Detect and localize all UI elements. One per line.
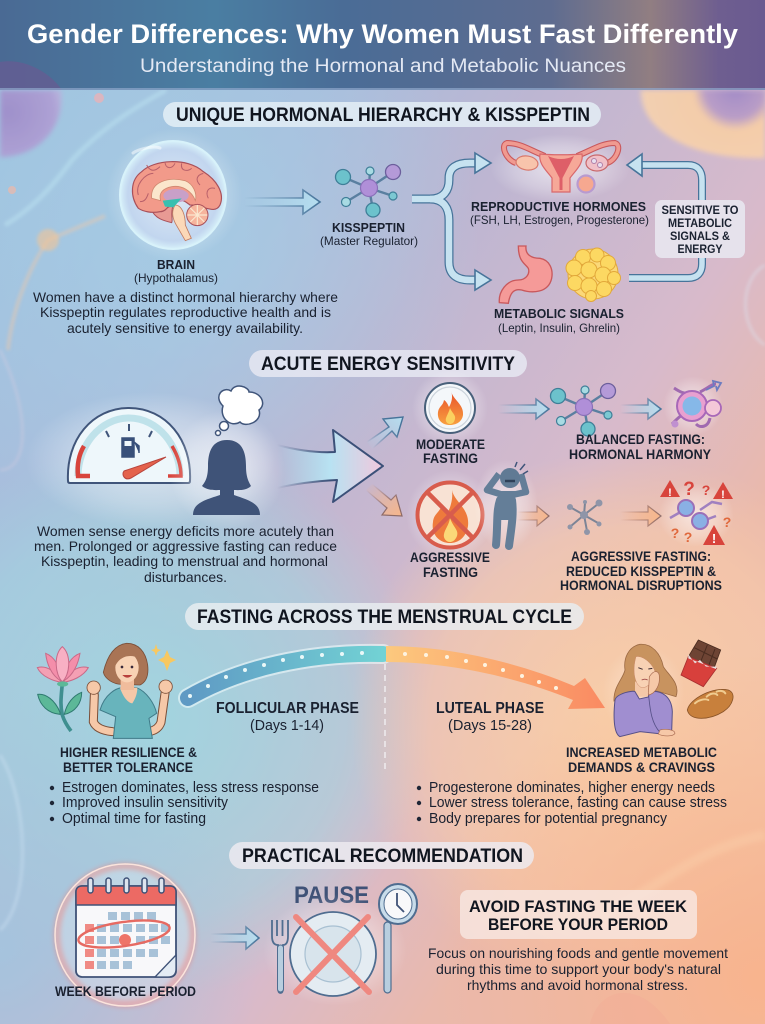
subtitle: Understanding the Hormonal and Metabolic Nuances [140, 56, 626, 77]
label: brain [134, 257, 218, 285]
icon: happy woman [87, 643, 172, 738]
text: hormonal hierarchy description: Women have a distinct hormonal hierarchy where [33, 289, 338, 305]
label: kisspeptin: KISSPEPTIN [332, 220, 405, 235]
arrow: molecule to harmony [620, 399, 661, 419]
heading: recommendation: PRACTICAL RECOMMENDATION [242, 846, 523, 867]
list: luteal needs: Progesterone dominates, higher energy needs [429, 780, 715, 796]
icon: hormonal disruption cluster: ? [684, 529, 692, 545]
icon: kisspeptin molecule [336, 164, 400, 217]
icon: tired woman [602, 644, 685, 738]
icon: aggressive flame crossed [406, 470, 494, 560]
icon: hormonal disruption cluster [658, 479, 734, 547]
icon: bread loaf [687, 689, 733, 718]
label: reduced kisspeptin outcome: HORMONAL DISRUPTIONS [560, 577, 722, 593]
list: follicular benefits: Estrogen dominates, less stress response [62, 780, 319, 796]
heading: menstrual cycle: FASTING ACROSS THE MENSTRUAL CYCLE [197, 607, 572, 628]
icon: hormonal disruption cluster: ? [671, 525, 679, 541]
label: pause: PAUSE [294, 882, 369, 909]
heading: hormonal hierarchy: UNIQUE HORMONAL HIERARCHY & KISSPEPTIN [176, 105, 590, 126]
icon: stomach [499, 246, 552, 303]
callout: avoid fasting: BEFORE YOUR PERIOD [488, 915, 668, 934]
icon: hormonal disruption cluster: ? [702, 482, 710, 498]
text: energy sensitivity description [34, 523, 337, 585]
label: reduced kisspeptin outcome [560, 548, 722, 593]
icon: hormonal disruption cluster: ! [712, 531, 716, 546]
arrow: up to moderate [367, 417, 403, 449]
icon: calendar [55, 864, 195, 1006]
text: hormonal hierarchy description: Kisspeptin regulates reproductive health and is [40, 304, 331, 320]
title: Gender Differences: Why Women Must Fast Differently [27, 19, 738, 49]
arrow: reduced molecule to disruption [620, 506, 661, 526]
icon: hormonal disruption cluster: ? [723, 514, 731, 530]
label: follicular phase: (Days 1-14) [250, 717, 324, 734]
arrow: calendar to plate [210, 927, 259, 949]
icon: brain in bubble [106, 129, 242, 261]
label: balanced fasting: HORMONAL HARMONY [569, 446, 712, 462]
section 3: menstrual cycle [37, 603, 733, 827]
label: increased demands: DEMANDS & CRAVINGS [568, 759, 715, 775]
label: metabolic signals [494, 306, 624, 335]
icon: healthy molecule [550, 384, 616, 436]
arrow: aggressive to molecule [517, 506, 549, 526]
text: recommendation description: during this time to support your body's natural [436, 961, 721, 977]
icon: reduced molecule [567, 500, 602, 535]
callout: sensitive to metabolic signals: SENSITIVE TO [662, 203, 738, 217]
section 4: practical recommendation [55, 842, 728, 1006]
arrow: metabolic feedback [627, 154, 702, 278]
label: brain: (Hypothalamus) [134, 271, 218, 285]
label: increased demands: INCREASED METABOLIC [566, 744, 717, 760]
icon: fat cells [566, 248, 620, 302]
icon: thought cloud [216, 386, 263, 436]
heading: energy sensitivity: ACUTE ENERGY SENSITIVITY [261, 354, 515, 375]
text: hormonal hierarchy description: acutely sensitive to energy availability. [67, 320, 303, 336]
icon: moderate flame [412, 370, 488, 446]
icon: stressed figure [474, 459, 538, 551]
label: higher resilience [60, 744, 197, 775]
text: energy sensitivity description: disturbances. [144, 569, 227, 585]
callout: avoid fasting [460, 890, 697, 939]
divider: cycle midline [384, 664, 386, 770]
list: luteal needs: Lower stress tolerance, fasting can cause stress [429, 795, 727, 811]
arrow: moderate to molecule [498, 399, 549, 419]
label: brain: BRAIN [157, 257, 195, 272]
label: aggressive fasting: AGGRESSIVE [410, 549, 490, 565]
label: week before period: WEEK BEFORE PERIOD [55, 983, 196, 999]
label: balanced fasting [569, 431, 712, 462]
icon: sparkles [151, 644, 176, 671]
icon: hormonal disruption cluster: ! [668, 487, 672, 499]
label: aggressive fasting [410, 549, 490, 580]
label: follicular phase [216, 700, 359, 734]
list: luteal needs [417, 780, 727, 827]
icon: fuel gauge [25, 392, 275, 528]
callout: sensitive to metabolic signals: ENERGY [678, 242, 722, 256]
header band [0, 0, 765, 90]
icon: hormonal disruption cluster: ! [721, 489, 725, 501]
icon: hormonal harmony receptor [663, 376, 723, 436]
callout: sensitive to metabolic signals [655, 200, 745, 258]
icon: crossed plate with cutlery [263, 884, 417, 1006]
icon: lotus flower [37, 647, 88, 731]
list: follicular benefits: Optimal time for fasting [62, 811, 206, 827]
text: energy sensitivity description: Kisspeptin, leading to menstrual and hormonal [41, 553, 328, 569]
icon: chocolate bar [681, 640, 721, 687]
label: reduced kisspeptin outcome: REDUCED KISSPEPTIN & [566, 563, 716, 579]
label: reproductive hormones: REPRODUCTIVE HORMONES [471, 199, 646, 214]
label: moderate fasting: MODERATE [416, 436, 485, 452]
list: follicular benefits: Improved insulin sensitivity [62, 795, 229, 811]
callout: sensitive to metabolic signals: SIGNALS & [670, 229, 730, 243]
label: reproductive hormones: (FSH, LH, Estrogen, Progesterone) [470, 213, 649, 227]
arrow: kisspeptin fork [412, 153, 491, 290]
callout: sensitive to metabolic signals: METABOLIC [668, 216, 732, 230]
label: moderate fasting [416, 436, 485, 466]
label: luteal phase: LUTEAL PHASE [436, 700, 544, 717]
text: energy sensitivity description: men. Prolonged or aggressive fasting can reduce [34, 538, 337, 554]
label: higher resilience: HIGHER RESILIENCE & [60, 744, 197, 760]
label: kisspeptin: (Master Regulator) [320, 234, 418, 248]
text: energy sensitivity description: Women sense energy deficits more acutely than [37, 523, 334, 539]
list: follicular benefits [50, 780, 319, 827]
label: kisspeptin [320, 220, 418, 248]
arrow: down to aggressive [366, 484, 402, 516]
label: follicular phase: FOLLICULAR PHASE [216, 700, 359, 717]
label: luteal phase: (Days 15-28) [448, 717, 532, 734]
arrow: brain to kisspeptin [244, 190, 320, 214]
label: balanced fasting: BALANCED FASTING: [576, 431, 705, 447]
label: metabolic signals: METABOLIC SIGNALS [494, 306, 624, 321]
chart: follicular arc [188, 651, 383, 698]
label: luteal phase [436, 700, 544, 734]
text: recommendation description [428, 945, 728, 993]
label: increased demands [566, 744, 717, 775]
label: reproductive hormones [470, 199, 649, 227]
icon: reproductive organs [490, 134, 630, 202]
text: recommendation description: rhythms and avoid hormonal stress. [467, 977, 688, 993]
icon: hormonal disruption cluster: ? [683, 479, 695, 500]
callout: avoid fasting: AVOID FASTING THE WEEK [469, 897, 688, 916]
text: recommendation description: Focus on nourishing foods and gentle movement [428, 945, 728, 961]
section 1: hormonal hierarchy [33, 102, 745, 336]
icon: female silhouette [169, 410, 285, 530]
label: metabolic signals: (Leptin, Insulin, Ghrelin) [498, 321, 620, 335]
label: aggressive fasting: FASTING [423, 564, 478, 580]
label: higher resilience: BETTER TOLERANCE [63, 759, 193, 775]
label: reduced kisspeptin outcome: AGGRESSIVE FASTING: [571, 548, 711, 564]
list: luteal needs: Body prepares for potential pregnancy [429, 811, 668, 827]
label: moderate fasting: FASTING [423, 450, 478, 466]
section 2: acute energy sensitivity [25, 350, 734, 593]
text: hormonal hierarchy description [33, 289, 338, 336]
chart: luteal arc arrow [386, 646, 605, 709]
arrow: large pathway arrow [277, 430, 383, 502]
